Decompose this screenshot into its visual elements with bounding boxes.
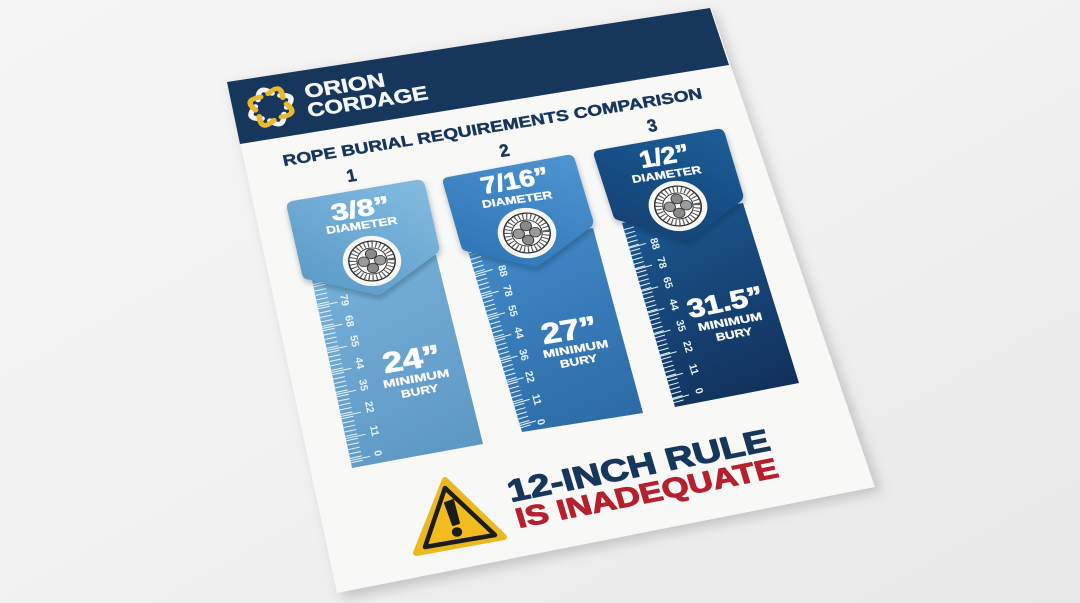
- ruler 3 scale numbers: 44: [666, 297, 681, 312]
- ruler 3 scale numbers: 88: [647, 236, 662, 251]
- bury value 3: [684, 282, 767, 344]
- panel: 1/2 inch rope: [594, 129, 799, 407]
- ruler 2 scale numbers: 44: [511, 326, 526, 340]
- tag 3 text: DIAMETER: [631, 164, 703, 186]
- ruler 2 scale numbers: 0: [534, 418, 547, 427]
- ruler 2 scale numbers: 11: [529, 393, 544, 407]
- tag 2 text: DIAMETER: [481, 189, 554, 211]
- tag 2 text: 7/16”: [478, 162, 551, 199]
- panel: 7/16 inch rope: [443, 155, 643, 432]
- ruler 2 ticks: [474, 250, 527, 427]
- tag 2 text: [478, 162, 554, 211]
- callout: 12-inch rule is inadequate: 12-INCH RULE: [503, 423, 774, 509]
- icon: warning triangle: [416, 480, 504, 553]
- tag 1 text: DIAMETER: [325, 215, 399, 237]
- ruler 1 scale numbers: [337, 293, 384, 457]
- ruler 3 scale numbers: 65: [660, 275, 675, 290]
- brand name: ORION: [303, 70, 387, 103]
- logo: braided ring: [246, 85, 296, 129]
- ruler 1 scale numbers: 22: [362, 400, 376, 414]
- ruler 3 ticks: [628, 226, 680, 402]
- tag 1 text: [325, 191, 399, 237]
- bury value 1: [380, 339, 451, 401]
- bury value 1: 24”: [380, 339, 444, 380]
- column numbers: [345, 115, 660, 186]
- bury value 3: BURY: [715, 326, 754, 344]
- ruler 2 scale numbers: 22: [522, 370, 537, 384]
- bury value 2: MINIMUM: [542, 338, 610, 361]
- ruler 1: [312, 255, 483, 468]
- tag 3: [594, 129, 743, 240]
- brand name: CORDAGE: [306, 83, 430, 122]
- ruler 1 scale numbers: 44: [352, 356, 366, 370]
- tag 2: [443, 155, 593, 267]
- column numbers: 2: [497, 140, 511, 161]
- title: ROPE BURIAL REQUIREMENTS COMPARISON: [281, 85, 704, 170]
- ruler 1 scale numbers: 79: [337, 293, 351, 307]
- ruler 3 scale numbers: 0: [692, 386, 705, 396]
- callout: 12-inch rule is inadequate: [503, 423, 782, 534]
- icon: rope cross-section 2: [494, 205, 560, 261]
- bury value 2: 27”: [538, 311, 601, 351]
- ruler 1 scale numbers: 55: [347, 334, 361, 348]
- bury value 2: [538, 311, 610, 371]
- column numbers: 3: [645, 115, 660, 136]
- tag 1: [287, 180, 439, 295]
- ruler 2 scale numbers: 36: [516, 348, 531, 362]
- ruler 3 scale numbers: 11: [686, 362, 701, 377]
- ruler 3 scale numbers: 35: [673, 318, 688, 333]
- ruler 2 scale numbers: 78: [500, 284, 515, 298]
- callout: 12-inch rule is inadequate: IS INADEQUATE: [512, 452, 782, 534]
- ruler 1 scale numbers: 68: [342, 314, 356, 328]
- column numbers: 1: [345, 165, 359, 186]
- ruler 3: [622, 203, 799, 407]
- ruler 2 scale numbers: 88: [495, 264, 510, 278]
- ruler 3 scale numbers: 22: [680, 339, 695, 354]
- ruler 1 scale numbers: 11: [367, 424, 381, 438]
- ruler 1 ticks: [319, 280, 360, 462]
- ruler 2 scale numbers: 55: [505, 304, 520, 318]
- bury value 2: BURY: [559, 353, 599, 371]
- icon: rope cross-section 3: [644, 178, 712, 234]
- paper sheet: [227, 8, 875, 593]
- bury value 3: MINIMUM: [697, 311, 764, 334]
- ruler 2: [468, 228, 643, 432]
- tag 3 text: 1/2”: [637, 140, 693, 174]
- ruler 3 scale numbers: 78: [654, 255, 669, 270]
- paper shadow: [232, 12, 881, 599]
- tag 1 text: 3/8”: [328, 191, 392, 226]
- panel: 3/8 inch rope: [287, 180, 483, 468]
- bury value 3: 31.5”: [684, 282, 767, 324]
- ruler 1 scale numbers: 35: [356, 378, 370, 392]
- ruler 2 scale numbers: [495, 264, 547, 427]
- ruler 1 scale numbers: 0: [371, 449, 384, 457]
- icon: rope cross-section 1: [340, 233, 404, 289]
- ruler 3 scale numbers: [647, 236, 705, 396]
- brand name: [303, 70, 430, 122]
- tag 3 text: [631, 140, 703, 186]
- bury value 1: MINIMUM: [382, 367, 451, 391]
- header band: [227, 8, 729, 144]
- bury value 1: BURY: [400, 383, 440, 401]
